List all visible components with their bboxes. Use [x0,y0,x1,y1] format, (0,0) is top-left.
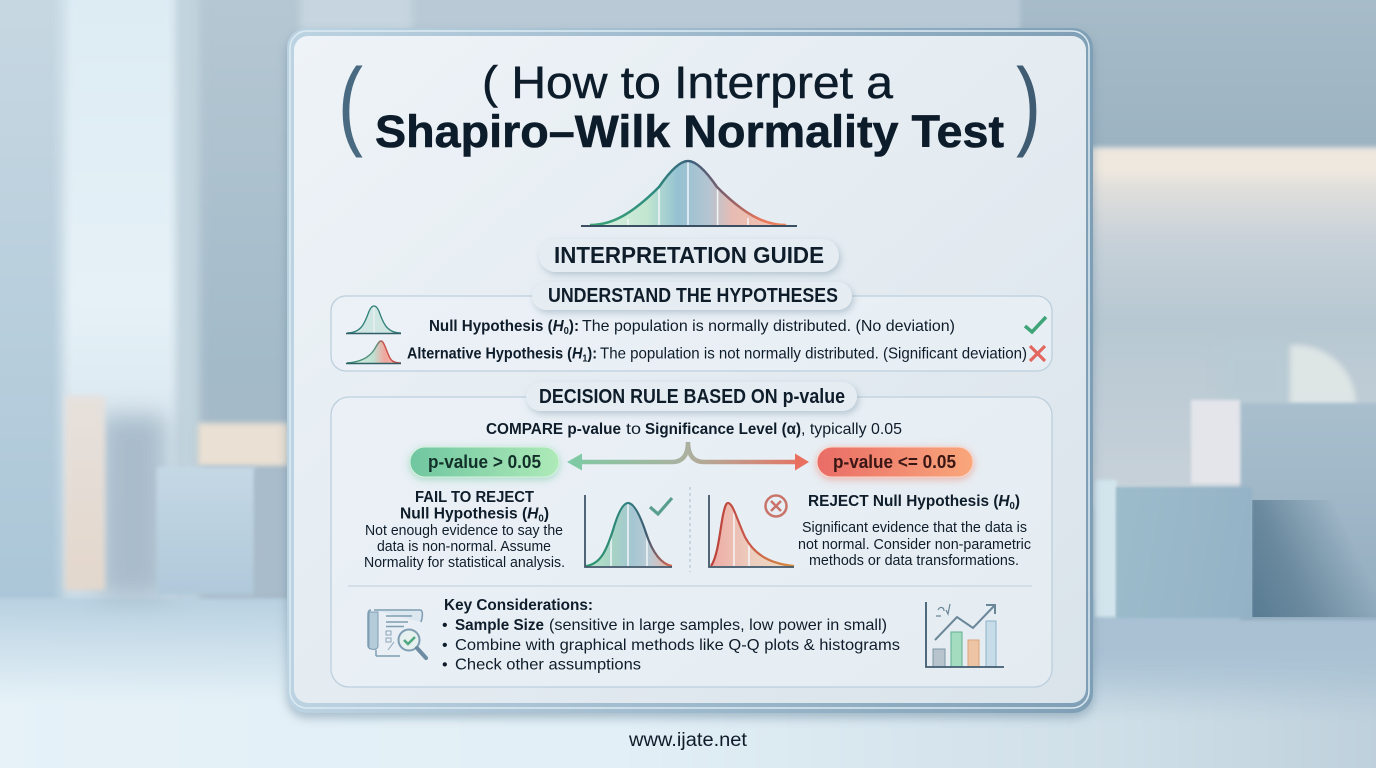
pill: p-value greater than 0.05: p-value > 0.05 [428,452,541,472]
text block: key considerations: • [442,637,448,654]
arrow: branching decision arrows [567,442,809,470]
text: null hypothesis: ): [569,318,579,335]
text block: fail to reject [364,489,565,571]
right big parenthesis: ) [1016,48,1041,158]
panel: decision rule [331,382,1052,687]
text block: key considerations: Key Considerations: [444,597,593,614]
title line 1: ( How to Interpret a [482,57,894,108]
text: alternative hypothesis: The population is not normally distributed. (Significant deviation) [600,346,1027,362]
website footer: www.ijate.net [628,730,748,751]
text block: reject: Significant evidence that the data is [802,520,1027,536]
heading pill: decision rule: DECISION RULE BASED ON p-value [539,386,845,408]
text block: fail to reject: data is non-normal. Assume [377,539,551,555]
text block: key considerations: (sensitive in large samples, low power in small) [549,617,887,634]
text block: key considerations: Check other assumptions [455,656,641,674]
text block: reject: 0 [1010,501,1015,512]
text: alternative hypothesis [407,346,1027,364]
text block: key considerations: Combine with graphical methods like Q-Q plots & histograms [455,637,900,654]
chart: skewed distribution [709,495,794,567]
text block: key considerations: • [442,656,448,674]
text block: fail to reject: ) [544,506,549,522]
pill: p-value greater than 0.05 [410,447,559,477]
text block: reject [798,493,1031,569]
icon: normal curve [346,306,401,334]
text block: fail to reject: Normality for statistical analysis. [364,555,565,571]
heading pill: understand the hypotheses: UNDERSTAND THE HYPOTHESES [548,285,838,307]
title line 2: Shapiro–Wilk Normality Test [375,106,1004,157]
chart: normal distribution [585,495,672,567]
text block: reject: methods or data transformations. [809,553,1019,569]
icon: alternative curve [346,341,401,364]
icon: cross in circle [766,496,786,516]
text block: fail to reject: FAIL TO REJECT [415,489,534,506]
text block: fail to reject: Null Hypothesis (H [400,506,539,522]
text block: reject: not normal. Consider non-parametric [798,537,1031,553]
text block: reject: REJECT Null Hypothesis (H [808,493,1010,510]
pill: p-value at most 0.05 [817,447,973,477]
text block: key considerations [442,597,900,674]
text: compare line [486,421,902,438]
text: null hypothesis: Null Hypothesis (H [429,318,564,335]
text block: fail to reject: 0 [538,514,544,524]
text: alternative hypothesis: Alternative Hypothesis (H [407,346,590,362]
panel: understand the hypotheses [331,282,1052,371]
icon: green check [1025,317,1046,332]
text: compare line: , typically 0.05 [801,421,902,438]
text: alternative hypothesis: ): [587,346,597,362]
text block: key considerations: • [442,617,448,634]
text block: key considerations: Sample Size [455,617,544,634]
pill: p-value at most 0.05: p-value <= 0.05 [833,452,956,472]
text: alternative hypothesis: 1 [582,354,588,364]
text: null hypothesis: The population is normally distributed. (No deviation) [582,318,955,335]
icon: red cross [1030,346,1045,361]
text: null hypothesis: 0 [564,326,569,337]
text: compare line: COMPARE p-value [486,421,621,438]
icon: check mark [650,498,672,514]
glass card frame [287,28,1093,713]
heading pill: interpretation guide: INTERPRETATION GUIDE [554,242,824,268]
text block: reject: ) [1015,493,1020,510]
left big parenthesis: ( [338,48,363,158]
text block: fail to reject: Not enough evidence to say the [365,523,563,539]
text: null hypothesis [429,318,955,337]
icon: bell curve [581,161,797,226]
chart icon: bars and trend arrow [926,602,1004,667]
heading pill: decision rule [526,382,857,411]
title [338,48,1041,158]
text: compare line: Significance Level (α) [645,421,801,438]
text: compare line: to [626,421,641,438]
icon: document with magnifier [368,610,426,658]
